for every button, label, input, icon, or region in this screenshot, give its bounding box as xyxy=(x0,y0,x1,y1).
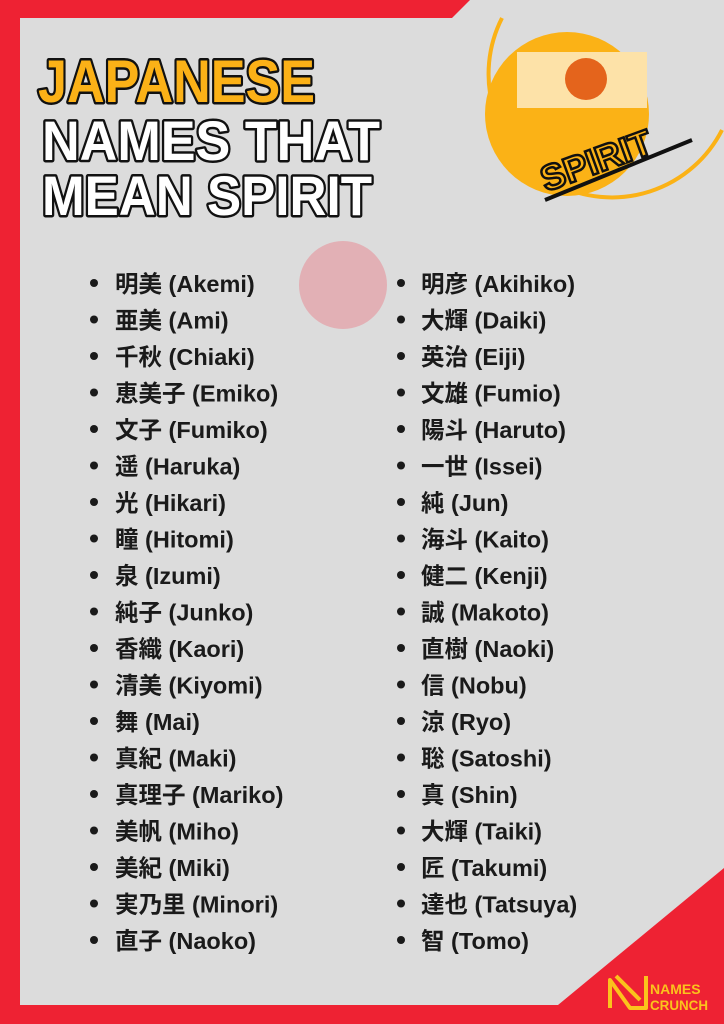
list: right column: 文雄 (Fumio) xyxy=(421,380,561,406)
list: left column: 舞 (Mai) xyxy=(115,709,200,735)
list: left column: 香織 (Kaori) xyxy=(115,636,244,662)
list: left column: 清美 (Kiyomi) xyxy=(115,672,263,698)
list: right column: 信 (Nobu) xyxy=(421,672,527,698)
list: left column: 美帆 (Miho) xyxy=(115,818,239,844)
emblem: spirit circle: SPIRIT xyxy=(535,121,658,200)
list: left column: 真理子 (Mariko) xyxy=(115,782,283,808)
list: right column: 一世 (Issei) xyxy=(421,454,542,480)
title xyxy=(38,48,380,227)
list: right column: 純 (Jun) xyxy=(421,490,508,516)
list: right column: 健二 (Kenji) xyxy=(421,563,548,589)
list: left column xyxy=(90,271,283,954)
title: JAPANESE xyxy=(38,48,315,115)
list: left column: 恵美子 (Emiko) xyxy=(115,380,278,406)
list: right column xyxy=(397,271,577,954)
list: right column: 英治 (Eiji) xyxy=(421,344,525,370)
list: right column: 達也 (Tatsuya) xyxy=(421,892,577,918)
list: right column: 大輝 (Daiki) xyxy=(421,308,546,334)
list: left column: 文子 (Fumiko) xyxy=(115,417,268,443)
emblem: spirit circle xyxy=(485,18,722,200)
list: right column: 直樹 (Naoki) xyxy=(421,636,554,662)
list: right column: 陽斗 (Haruto) xyxy=(421,417,566,443)
list: left column: 泉 (Izumi) xyxy=(115,563,221,589)
title: NAMES THAT xyxy=(42,109,380,172)
list: left column: 純子 (Junko) xyxy=(115,600,253,626)
list: right column: 誠 (Makoto) xyxy=(421,600,549,626)
list: left column: 光 (Hikari) xyxy=(115,490,226,516)
list: right column: 聡 (Satoshi) xyxy=(421,746,552,772)
logo: names crunch: NAMES xyxy=(650,981,701,997)
title: MEAN SPIRIT xyxy=(42,164,372,227)
list: right column: 明彦 (Akihiko) xyxy=(421,271,575,297)
list: right column: 大輝 (Taiki) xyxy=(421,818,542,844)
list: left column: 実乃里 (Minori) xyxy=(115,892,278,918)
list: left column: 遥 (Haruka) xyxy=(115,454,240,480)
list: left column: 真紀 (Maki) xyxy=(115,746,236,772)
list: left column: 瞳 (Hitomi) xyxy=(115,526,234,552)
list: right column: 海斗 (Kaito) xyxy=(421,526,549,552)
list: left column: 直子 (Naoko) xyxy=(115,928,256,954)
decorative pink circle xyxy=(299,241,387,329)
list: left column: 亜美 (Ami) xyxy=(115,308,229,334)
logo: names crunch: CRUNCH xyxy=(650,997,708,1013)
list: right column: 匠 (Takumi) xyxy=(421,855,547,881)
list: left column: 千秋 (Chiaki) xyxy=(115,344,255,370)
logo: names crunch xyxy=(610,976,708,1013)
list: right column: 真 (Shin) xyxy=(421,782,518,808)
list: left column: 明美 (Akemi) xyxy=(115,271,255,297)
list: left column: 美紀 (Miki) xyxy=(115,855,230,881)
list: right column: 智 (Tomo) xyxy=(421,928,529,954)
list: right column: 涼 (Ryo) xyxy=(421,709,511,735)
